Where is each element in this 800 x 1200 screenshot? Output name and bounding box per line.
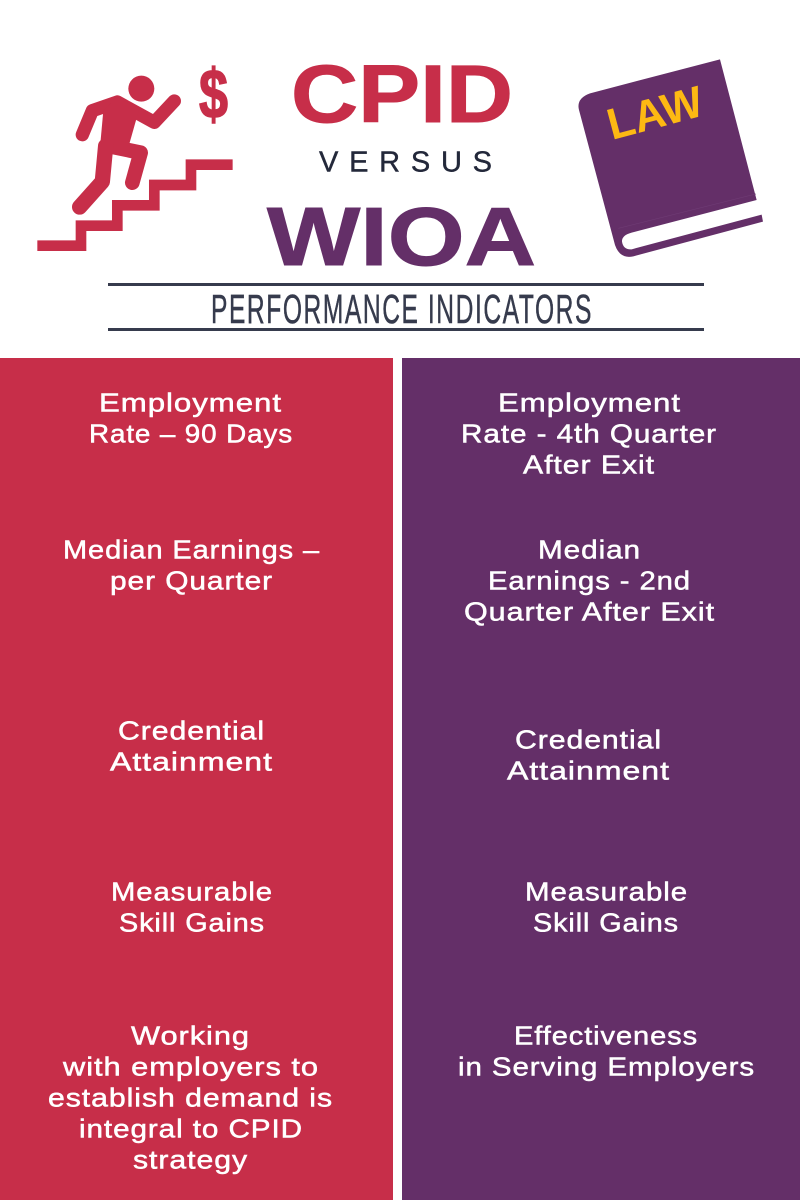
icon: law book	[578, 59, 763, 257]
heading: performance indicators	[108, 283, 704, 333]
CPID item: median earnings: Median Earnings –	[63, 534, 320, 564]
WIOA item: credential attainment: Credential	[515, 724, 662, 754]
WIOA item: serving employers: in Serving Employers	[458, 1052, 755, 1082]
WIOA item: credential attainment: Attainment	[507, 756, 670, 786]
CPID item: employer strategy	[48, 1020, 333, 1174]
panel: WIOA column	[402, 358, 800, 1200]
WIOA item: median earnings	[464, 534, 715, 626]
WIOA item: employment rate: Rate - 4th Quarter	[461, 418, 717, 448]
CPID item: credential attainment: Credential	[118, 716, 265, 746]
CPID item: credential attainment	[110, 716, 273, 776]
book cover	[578, 59, 763, 257]
stairs	[37, 165, 233, 246]
WIOA item: serving employers: Effectiveness	[514, 1020, 698, 1050]
CPID item: employer strategy: integral to CPID	[79, 1114, 303, 1144]
book label: LAW	[602, 77, 709, 150]
CPID item: median earnings	[63, 534, 320, 596]
CPID item: skill gains: Measurable	[111, 876, 273, 906]
WIOA item: serving employers	[458, 1020, 755, 1082]
heading: performance indicators: PERFORMANCE INDICATORS	[211, 287, 591, 333]
WIOA item: credential attainment	[507, 724, 670, 786]
WIOA item: median earnings: Median	[538, 534, 641, 564]
title: versus: VERSUS	[319, 146, 492, 178]
WIOA item: skill gains: Skill Gains	[533, 908, 679, 938]
CPID item: employer strategy: establish demand is	[48, 1082, 333, 1112]
WIOA item: median earnings: Quarter After Exit	[464, 596, 715, 626]
CPID item: skill gains	[111, 876, 273, 938]
WIOA item: skill gains: Measurable	[525, 876, 688, 906]
CPID item: employer strategy: with employers to	[62, 1052, 319, 1082]
WIOA item: employment rate: After Exit	[523, 450, 655, 480]
CPID item: employer strategy: strategy	[133, 1144, 248, 1174]
CPID item: median earnings: per Quarter	[110, 566, 273, 596]
title: CPID: CPID	[291, 49, 513, 140]
CPID item: skill gains: Skill Gains	[119, 908, 265, 938]
icon: runner climbing stairs toward dollar sign	[37, 55, 233, 246]
CPID item: employment rate: Employment	[99, 388, 282, 418]
dollar sign: $	[199, 55, 228, 133]
runner figure	[80, 76, 174, 207]
WIOA item: employment rate: Employment	[498, 388, 681, 418]
WIOA item: median earnings: Earnings - 2nd	[488, 566, 691, 596]
CPID item: employer strategy: Working	[131, 1020, 250, 1050]
CPID item: employment rate: Rate – 90 Days	[89, 418, 293, 448]
WIOA item: skill gains	[525, 876, 688, 938]
panel: CPID column	[0, 358, 393, 1200]
WIOA item: employment rate	[461, 388, 717, 480]
CPID item: employment rate	[89, 388, 293, 448]
title: WIOA: WIOA	[267, 190, 536, 283]
CPID item: credential attainment: Attainment	[110, 746, 273, 776]
